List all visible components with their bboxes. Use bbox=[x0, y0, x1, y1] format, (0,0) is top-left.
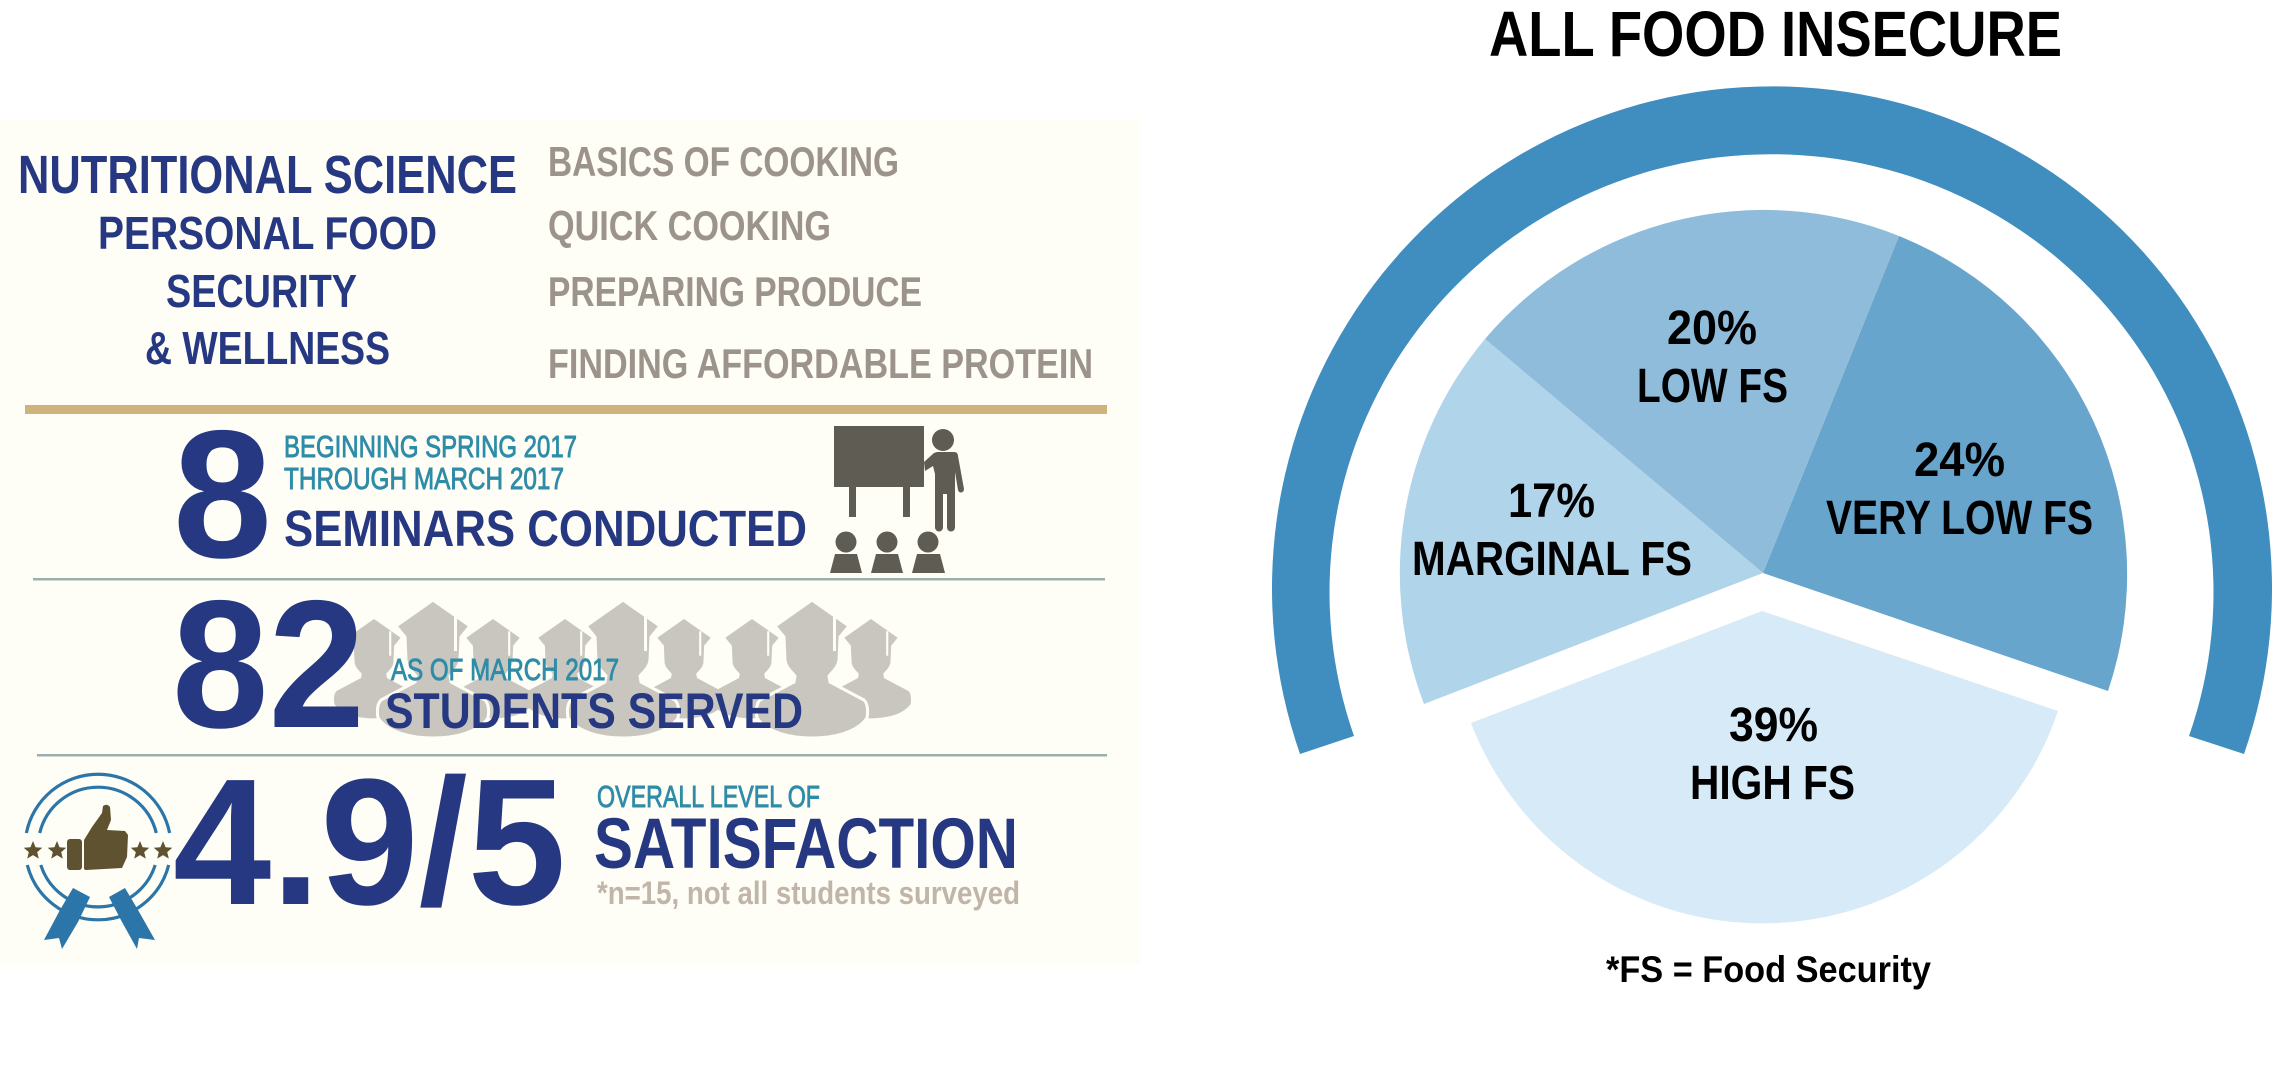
stat: students served: STUDENTS SERVED bbox=[385, 683, 803, 739]
slice: marginal FS: MARGINAL FS bbox=[1412, 533, 1692, 586]
heading: program title: PERSONAL FOOD bbox=[98, 207, 437, 259]
slice: high FS bbox=[1471, 611, 2058, 923]
text block: seminar topics: QUICK COOKING bbox=[548, 202, 831, 249]
stat: satisfaction score: OVERALL LEVEL OF bbox=[597, 779, 820, 814]
icon: satisfaction medal bbox=[24, 774, 172, 949]
text block: seminar topics bbox=[548, 138, 1093, 387]
icon: graduate silhouettes bbox=[334, 600, 911, 738]
slice: marginal FS: 17% bbox=[1508, 475, 1595, 528]
text block: seminar topics: BASICS OF COOKING bbox=[548, 138, 899, 185]
stat: students served: AS OF MARCH 2017 bbox=[391, 652, 619, 687]
stat: satisfaction score: 4.9/5 bbox=[173, 742, 566, 943]
stat: seminars conducted bbox=[173, 392, 807, 596]
arc: outer gauge bbox=[1272, 86, 2272, 754]
slice: very low FS bbox=[1763, 236, 2127, 691]
chart: food security gauge bbox=[1272, 86, 2272, 923]
slice: very low FS: VERY LOW FS bbox=[1826, 492, 2093, 545]
panel: seminar summary bbox=[0, 120, 1140, 965]
heading: program title bbox=[18, 145, 517, 374]
stat: seminars conducted: THROUGH MARCH 2017 bbox=[284, 461, 564, 496]
stat: satisfaction score: SATISFACTION bbox=[594, 805, 1018, 884]
slice: marginal FS bbox=[1400, 339, 1763, 704]
stat: students served: 82 bbox=[172, 562, 365, 766]
icon: teacher at board with students bbox=[830, 426, 964, 573]
slice: high FS: HIGH FS bbox=[1690, 757, 1855, 810]
heading: program title: & WELLNESS bbox=[145, 322, 390, 374]
text block: seminar topics: FINDING AFFORDABLE PROTEIN bbox=[548, 340, 1093, 387]
slice: low FS bbox=[1485, 210, 1899, 573]
slice: low FS: 20% bbox=[1667, 302, 1757, 355]
heading: program title: SECURITY bbox=[166, 265, 357, 317]
stat: seminars conducted: SEMINARS CONDUCTED bbox=[284, 500, 807, 557]
text block: seminar topics: PREPARING PRODUCE bbox=[548, 268, 922, 315]
stat: seminars conducted: 8 bbox=[173, 392, 272, 596]
stat: seminars conducted: BEGINNING SPRING 2017 bbox=[284, 429, 577, 464]
heading: program title: NUTRITIONAL SCIENCE bbox=[18, 145, 517, 205]
slice: high FS: 39% bbox=[1729, 699, 1818, 752]
stat: students served bbox=[172, 562, 803, 766]
stat: satisfaction score bbox=[173, 742, 1020, 943]
slice: very low FS: 24% bbox=[1914, 434, 2005, 487]
footnote: FS definition: *FS = Food Security bbox=[1606, 949, 1931, 990]
slice: low FS: LOW FS bbox=[1637, 360, 1788, 413]
title: all food insecure: ALL FOOD INSECURE bbox=[1489, 0, 2062, 70]
stat: satisfaction score: *n=15, not all students surveyed bbox=[597, 875, 1020, 911]
